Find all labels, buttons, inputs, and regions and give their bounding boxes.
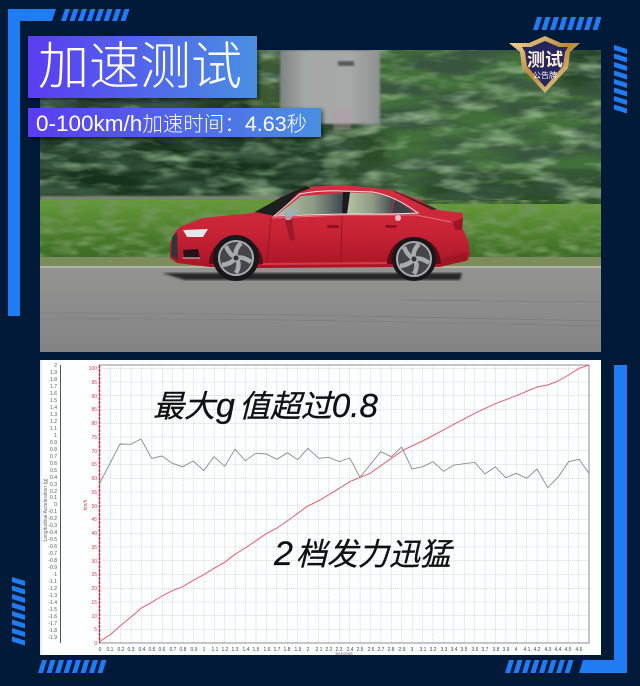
time axis labels: 4.1 [524, 647, 531, 653]
red speed axis: 80 [91, 421, 97, 427]
time axis labels: 0.2 [118, 647, 125, 653]
red speed axis: 70 [91, 449, 97, 455]
windows [274, 191, 418, 216]
time axis labels: 3.1 [420, 647, 427, 653]
left g axis: -1.5 [48, 607, 57, 613]
time axis labels: 3.7 [482, 647, 489, 653]
time axis labels: 4.3 [545, 647, 552, 653]
time axis labels: 1.6 [264, 647, 271, 653]
left g axis: 0.6 [50, 461, 57, 467]
blurred tree background [40, 40, 610, 215]
left g axis: -0.2 [48, 516, 57, 522]
time axis labels: 2.8 [388, 647, 395, 653]
title banner: 加速测试 [38, 38, 242, 95]
bottom-left slashes [38, 660, 106, 673]
chart panel: acceleration and speed over time [40, 360, 601, 655]
time axis labels: 0.7 [170, 647, 177, 653]
time axis labels: 3.2 [430, 647, 437, 653]
badge subtext: 公告牌 [533, 70, 557, 80]
time axis labels: 0 [99, 647, 102, 653]
time axis labels: 2.6 [368, 647, 375, 653]
left g axis: -1 [53, 572, 57, 578]
bottom-right slashes [505, 660, 574, 673]
time axis labels: 1.1 [212, 647, 219, 653]
time axis labels: 1.4 [243, 647, 250, 653]
annotation: second gear: 2档发力迅猛 [273, 535, 455, 573]
red speed axis: 60 [91, 476, 97, 482]
red speed axis: 100 [89, 366, 97, 372]
time axis labels: 2 [307, 647, 310, 653]
left g axis: -0.1 [48, 509, 57, 515]
red speed axis: 5 [94, 627, 97, 633]
grey acceleration line [99, 439, 589, 488]
left g axis: -0.9 [48, 565, 57, 571]
subtitle banner: 0-100km/h加速时间：4.63秒 [36, 107, 307, 137]
left g axis [48, 363, 60, 643]
badge text: 测试 [527, 50, 563, 70]
time axis labels: 0.8 [180, 647, 187, 653]
time axis labels: 3.9 [503, 647, 510, 653]
left g axis: 1.9 [50, 370, 57, 376]
windshield [255, 186, 311, 216]
red speed axis: 35 [91, 545, 97, 551]
body lines, handles and lights [171, 215, 468, 266]
left g axis: -0.5 [48, 537, 57, 543]
car [170, 185, 470, 281]
time axis labels: 1.7 [274, 647, 281, 653]
time axis labels: 0.3 [128, 647, 135, 653]
time axis labels: 1.9 [295, 647, 302, 653]
left g axis: 0.3 [50, 482, 57, 488]
red speed axis: 0 [94, 641, 97, 647]
left g axis: -0.7 [48, 551, 57, 557]
mirror [284, 209, 297, 241]
time axis labels: 3.4 [451, 647, 458, 653]
red speed axis: 50 [91, 504, 97, 510]
red speed axis: 45 [91, 517, 97, 523]
time axis labels: 3.5 [461, 647, 468, 653]
left g axis: 0.1 [50, 495, 57, 501]
top-right slashes [533, 17, 602, 30]
left side slashes [12, 577, 25, 646]
red speed axis: 55 [91, 490, 97, 496]
front wheel [209, 235, 263, 281]
red speed axis: 25 [91, 572, 97, 578]
rear wheel [387, 237, 441, 281]
time axis labels: 0.6 [159, 647, 166, 653]
left g axis: 1.7 [50, 384, 57, 390]
red speed axis: 85 [91, 407, 97, 413]
red speed axis [89, 365, 100, 647]
left g axis: 1.4 [50, 405, 57, 411]
time axis labels: 0.4 [139, 647, 146, 653]
red speed axis: 40 [91, 531, 97, 537]
time axis labels: 1.3 [232, 647, 239, 653]
badge: test bulletin shield [509, 36, 580, 93]
speed axis title: km/h [83, 499, 89, 510]
time axis labels: 4 [515, 647, 518, 653]
time axis labels: 4.5 [565, 647, 572, 653]
time axis labels: 0.5 [149, 647, 156, 653]
green hedge [40, 196, 601, 260]
time axis labels: 3.6 [472, 647, 479, 653]
left g axis: 0.7 [50, 454, 57, 460]
photo: red sedan accelerating on a road [40, 50, 601, 352]
time axis labels: 4.6 [576, 647, 583, 653]
top-left slashes [61, 9, 130, 21]
time axis labels: 2.5 [357, 647, 364, 653]
left g axis: -1.3 [48, 593, 57, 599]
bottom-right bracket [579, 365, 627, 673]
top-left bracket [8, 9, 56, 316]
time axis labels: 3.3 [441, 647, 448, 653]
red speed axis: 90 [91, 394, 97, 400]
time axis labels: 2.4 [347, 647, 354, 653]
rear glass edge [392, 190, 437, 210]
left g axis: 0.5 [50, 468, 57, 474]
time axis labels: 2.9 [399, 647, 406, 653]
left g axis: 0.9 [50, 440, 57, 446]
time axis labels: 2.7 [378, 647, 385, 653]
left g axis: -0.8 [48, 558, 57, 564]
time axis labels: 1.2 [222, 647, 229, 653]
time axis labels: 1.8 [284, 647, 291, 653]
right side slashes [614, 45, 627, 114]
blurred building [280, 50, 380, 130]
left g axis: -1.2 [48, 586, 57, 592]
time axis labels: 2.2 [326, 647, 333, 653]
left g axis: 1.2 [50, 419, 57, 425]
red speed axis: 15 [91, 600, 97, 606]
left g axis: 1.6 [50, 391, 57, 397]
left g axis: -1.4 [48, 600, 57, 606]
red speed axis: 30 [91, 559, 97, 565]
time axis labels: 2.1 [316, 647, 323, 653]
left g axis: 1.8 [50, 377, 57, 383]
left g axis: -1.7 [48, 621, 57, 627]
time axis labels: 1.5 [253, 647, 260, 653]
left g axis: -1.9 [48, 635, 57, 641]
left g axis: -1.8 [48, 628, 57, 634]
left g axis: -1.1 [48, 579, 57, 585]
car body [170, 185, 470, 268]
left g axis: 0.4 [50, 475, 57, 481]
time axis labels: 3 [411, 647, 414, 653]
left g axis: 0.8 [50, 447, 57, 453]
left g axis: 2 [54, 363, 57, 369]
left g axis: -0.3 [48, 523, 57, 529]
left g axis: 1.1 [50, 426, 57, 432]
red speed axis: 95 [91, 380, 97, 386]
time axis labels [99, 647, 583, 653]
time axis labels: 2.3 [336, 647, 343, 653]
red speed axis: 65 [91, 462, 97, 468]
left g axis: 1.5 [50, 398, 57, 404]
red speed axis: 20 [91, 586, 97, 592]
left g axis: 1 [54, 433, 57, 439]
red speed line [99, 365, 589, 642]
time axis labels: 0.1 [107, 647, 114, 653]
left g axis: -0.6 [48, 544, 57, 550]
left g axis: 0.2 [50, 489, 57, 495]
time axis labels: 4.4 [555, 647, 562, 653]
annotation: peak g value: 最大g值超过0.8 [153, 387, 378, 425]
left g axis: 1.3 [50, 412, 57, 418]
g axis title: Longitudinal Acceleration (g) [43, 478, 49, 542]
time axis labels: 4.2 [534, 647, 541, 653]
red speed axis: 10 [91, 614, 97, 620]
road with kerb [40, 257, 601, 352]
red speed axis: 75 [91, 435, 97, 441]
left g axis: 0 [54, 502, 57, 508]
time axis labels: 0.9 [191, 647, 198, 653]
time axis labels: 3.8 [493, 647, 500, 653]
plot grid [100, 365, 589, 643]
left g axis: -0.4 [48, 530, 57, 536]
left g axis: -1.6 [48, 614, 57, 620]
time axis labels: 1 [203, 647, 206, 653]
